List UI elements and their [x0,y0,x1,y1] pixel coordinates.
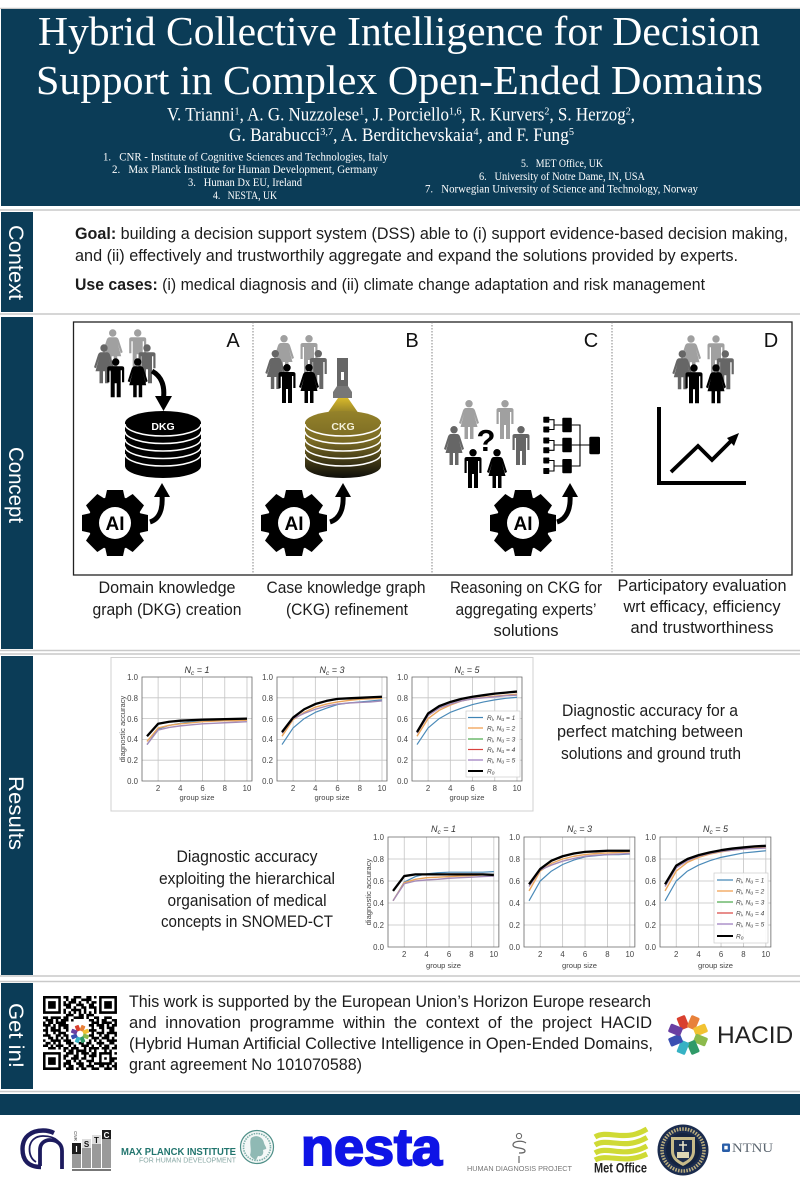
chart: Nc=3: 10 [625,950,635,959]
chart: Nc=1: 2 [156,784,160,793]
logo: ISTC: C [104,1131,110,1140]
chart: Nc=3: 2 [538,950,542,959]
legend: R [487,747,492,754]
chart group: perfect matching [111,658,533,811]
chart: Nc=1: = 1 [194,665,210,675]
concept captions: wrt efficacy, efficiency [622,598,781,616]
logo: Human Diagnosis Project: HUMAN DIAGNOSIS PROJECT [467,1164,572,1173]
legend: = 5 [753,922,765,928]
logo: Met Office [594,1129,647,1176]
legend: R [736,878,741,884]
legend: i [741,902,743,908]
legend: R [487,726,492,732]
arrow: experts to DKG [152,371,172,411]
authors: 3,7 [320,126,334,138]
legend: R [487,758,492,764]
legend: , N [493,758,502,764]
arrow: AI to CKG [330,483,351,522]
header banner [1,8,800,206]
chart: Nc=5: N [703,824,709,834]
authors: 5 [569,126,574,138]
chart: Nc=3: group size [314,793,350,802]
logo: ISTC: CNR [73,1131,78,1142]
chart: Nc=3: 0.8 [509,855,520,864]
legend: o [741,936,744,942]
logo: nesta: nesta [301,1119,443,1177]
icon: AI gear B [261,490,327,556]
icon: AI gear B: AI [284,514,304,535]
legend: R [736,900,741,906]
legend: = 2 [753,888,765,896]
chart: Nc=3: 8 [358,784,362,793]
chart: Nc=1: 10 [489,950,499,959]
tab label: get in: Get in! [4,1003,27,1068]
chart: Nc=1: 0.4 [127,735,139,744]
chart: Nc=1: 0.4 [373,899,385,908]
concept captions: (CKG) refinement [286,601,408,619]
text: hierarchical description: organisation of medical [168,892,326,910]
concept captions: Domain knowledge [98,579,236,597]
legend: u [750,880,753,886]
logo: NTNU [722,1140,774,1155]
chart: Nc=3: 8 [605,950,610,959]
chart: Nc=5: 8 [741,950,746,959]
authors [167,106,635,146]
chart: Nc=5: 0.8 [397,694,408,703]
title [36,8,763,103]
chart: Nc=1: 4 [424,950,429,959]
chart: Nc=3: 2 [291,784,295,793]
icon: experts group D [672,335,734,403]
legend: R [736,934,741,940]
chart: Nc=1: 6 [447,950,451,959]
chart: Nc=3: 0.0 [262,777,274,786]
icon: experts group A [94,329,156,397]
panel: get in [1,983,793,1089]
tab label: results: Results [4,776,27,850]
chart: Nc=1: N [431,824,437,834]
legend: , N [742,888,751,896]
legend: u [501,760,504,766]
legend: = 2 [504,726,516,732]
chart: Nc=1: 0.6 [373,877,384,886]
legend: u [750,890,753,896]
chart: Nc=5: 1.0 [397,673,409,682]
legend: R [487,715,492,722]
chart: Nc=1: 0.8 [373,855,384,864]
chart: Nc=3: 0.6 [509,877,520,886]
column C: reasoning [444,330,600,556]
chart: Nc=5: 0.6 [397,715,408,724]
affiliations left: 1. CNR - Institute of Cognitive Sciences and Technologies, Italy [103,152,388,164]
chart: Nc=1: 0.6 [127,715,138,724]
affiliations right: 6. University of Notre Dame, IN, USA [479,171,646,183]
chart: Nc=3 [262,665,387,802]
chart: Nc=5: 8 [493,784,497,793]
chart: Nc=5: 0.0 [397,777,409,786]
logo: ISTC: S [84,1140,90,1149]
funding text: grant agreement No 101070588) [129,1056,362,1074]
logo: Human Diagnosis Project [467,1133,572,1173]
chart: Nc=5: 0.4 [645,899,657,908]
chart: Nc=3: 4 [313,784,318,793]
legend: = 3 [753,900,765,906]
authors: , J. Porciello [364,106,449,126]
chart: Nc=3: 10 [378,784,387,793]
legend: i [492,760,494,766]
logo: University of Notre Dame seal [658,1124,708,1176]
legend: u [501,749,504,755]
chart: Nc=3: 1.0 [262,673,274,682]
authors: 1 [359,106,364,118]
chart: Nc=5: 6 [470,784,475,793]
icon: CKG database [305,411,381,478]
icon: experts group C [444,400,530,488]
chart: Nc=3: = 3 [329,665,345,675]
chart: Nc=3: 6 [583,950,587,959]
chart: Nc=3: 0.8 [262,694,273,703]
chart: Nc=3: c [326,670,330,677]
chart: Nc=3: 0.2 [509,921,520,930]
legend: i [492,749,494,755]
chart: Nc=5: 10 [761,950,771,959]
footer band [0,1094,800,1115]
tab label: context: Context [4,225,27,300]
affiliations right: 5. MET Office, UK [521,158,604,170]
legend: = 5 [504,758,516,764]
chart: Nc=3: 4 [560,950,565,959]
legend: i [492,728,494,734]
goal text [75,225,788,265]
chart: Nc=5: 4 [696,950,701,959]
chart: Nc=5: 4 [448,784,453,793]
authors: , [631,106,635,126]
chart: Nc=3: = 3 [577,824,592,834]
logo: Max Planck Institute: FOR HUMAN DEVELOPMENT [139,1158,237,1164]
concept captions: Participatory evaluation [618,577,786,595]
affiliations left [103,152,388,202]
chart: Nc=5: 2 [674,950,678,959]
authors: , and F. Fung [478,126,569,146]
title: Support in Complex Open-Ended Domains [36,57,763,103]
icon: AI gear C [490,490,556,556]
column B: CKG refinement: B [405,330,419,352]
authors: 1,6 [449,106,462,118]
tab label: concept: Concept [4,447,27,523]
chart: Nc=3: 0.4 [509,899,521,908]
y axis label: diagnostic accuracy [118,695,127,762]
authors: 4 [473,126,479,138]
chart: Nc=1: 6 [200,784,205,793]
chart: Nc=5: 0.0 [645,943,657,952]
column A: DKG creation [82,329,240,556]
authors: 2 [544,106,549,118]
icon: question mark: ? [477,423,495,458]
legend: o [492,770,495,776]
column A: DKG creation: A [226,330,240,352]
goal text: and (ii) effectively and trustworthily aggregate and expand the solutions provided by experts. [75,247,738,265]
chart: Nc=1 [127,665,252,802]
chart: Nc=5: group size [698,961,733,970]
chart: Nc=5: c [461,670,465,677]
chart: Nc=1: 2 [402,950,406,959]
text: perfect matching description: perfect matching between [557,723,743,741]
icon: experts group B [265,335,327,403]
chart: Nc=1: 0.2 [373,921,384,930]
chart: Nc=1 [373,824,499,970]
legend: = 1 [753,878,765,884]
chart: Nc=1: = 1 [441,824,456,834]
legend: u [750,912,753,918]
chart: Nc=1: c [437,829,441,836]
chart: Nc=5: N [454,665,461,675]
chart: Nc=5: 0.6 [645,877,656,886]
chart: Nc=1: 0.8 [127,694,138,703]
authors: , A. Berditchevskaia [333,126,473,146]
icon: rising line chart [659,407,746,483]
legend: i [492,717,494,723]
text: perfect matching description: Diagnostic accuracy for a [562,702,738,720]
chart: Nc=1: 8 [469,950,474,959]
funding text: This work is supported by the European Union’s Horizon Europe research [129,993,651,1011]
affiliations right: 7. Norwegian University of Science and Technology, Norway [425,184,698,196]
chart: Nc=3: group size [562,961,597,970]
chart: Nc=5: 10 [513,784,522,793]
chart: Nc=1: 10 [243,784,252,793]
chart: Nc=3: c [573,829,577,836]
legend [466,711,520,777]
affiliations left: 4. NESTA, UK [213,190,278,202]
legend: u [501,738,504,744]
logo: Max Planck Institute [121,1130,274,1164]
chart: Nc=5: 0.2 [397,756,408,765]
affiliations left: 2. Max Planck Institute for Human Development, Germany [112,164,378,176]
logo: ISTC: T [94,1136,99,1145]
legend: u [750,902,753,908]
column C: reasoning: C [584,330,598,352]
authors: V. Trianni [167,106,241,126]
chart: Nc=3: 0.4 [262,735,274,744]
chart: Nc=1: 0.0 [373,943,385,952]
legend: R [736,910,741,918]
chart: Nc=3: 1.0 [509,833,521,842]
legend: i [741,890,743,896]
legend: , N [493,715,502,722]
concept captions: solutions [494,622,558,640]
icon: DKG database: DKG [151,421,175,433]
authors: , S. Herzog [549,106,626,126]
chart: Nc=1: 1.0 [127,673,139,682]
chart: Nc=3: N [567,824,573,834]
legend: , N [493,726,502,732]
chart: Nc=3 [509,824,635,970]
chart group: hierarchical [364,824,771,970]
arrow: AI to DKG [150,483,170,522]
legend: u [501,717,504,723]
icon: QR centre flower [71,1025,89,1043]
concept captions: aggregating experts’ [456,601,596,619]
legend: u [750,924,753,930]
logo: HACID: HACID [717,1022,793,1049]
icon: AI gear A: AI [106,514,124,535]
legend: i [741,880,743,886]
chart: Nc=1: 0.0 [127,777,139,786]
title: Hybrid Collective Intelligence for Decision [38,8,760,54]
panel: concept [1,317,792,649]
chart: Nc=1: 4 [178,784,183,793]
chart: Nc=3: N [319,665,326,675]
legend [714,873,768,943]
chart: Nc=3: 0.6 [262,715,273,724]
chart: Nc=3: 0.0 [509,943,521,952]
affiliations right [425,158,698,196]
legend: R [736,922,741,928]
chart: Nc=5: group size [449,793,485,802]
chart: Nc=1: 1.0 [373,833,385,842]
legend: i [741,924,743,930]
logo: ISTC: I [75,1145,78,1154]
text: perfect matching description: solutions and ground truth [561,745,741,763]
logo: Met Office: Met Office [594,1160,647,1176]
icon: spotlight [327,358,359,414]
affiliations left: 3. Human Dx EU, Ireland [188,177,302,189]
chart: Nc=3: 6 [335,784,340,793]
chart: Nc=5 [645,824,771,970]
legend: = 4 [753,910,765,918]
legend: i [492,738,494,744]
funding text: and innovation programme within the context of the project HACID [129,1014,652,1032]
legend: , N [742,878,751,884]
legend: , N [742,910,751,918]
concept captions: Case knowledge graph [266,579,426,597]
concept figure frame [74,322,792,575]
chart: Nc=5 [397,665,522,802]
authors: , A. G. Nuzzolese [240,106,359,126]
panel: context [1,212,788,312]
chart: Nc=5: 2 [426,784,430,793]
goal text: Goal: building a decision support system (DSS) able to (i) support evidence-based decision making, [75,225,788,243]
chart: Nc=5: = 5 [713,824,729,834]
chart: Nc=5: 0.4 [397,735,409,744]
chart: Nc=5: 0.2 [645,921,656,930]
text: hierarchical description [159,848,335,931]
panel: results [1,656,771,975]
chart: Nc=1: group size [426,961,461,970]
icon: AI gear C: AI [514,514,532,535]
chart: Nc=1: N [184,665,191,675]
legend: = 3 [504,736,516,744]
concept captions: and trustworthiness [630,619,774,637]
logo: NTNU: NTNU [732,1140,774,1155]
QR code [43,997,117,1069]
column B: CKG refinement [261,330,419,556]
legend: R [487,736,492,744]
text: perfect matching description [557,702,743,763]
funding text [129,993,653,1074]
icon: solution tree [543,417,600,474]
concept captions: graph (DKG) creation [92,601,242,619]
legend: , N [742,922,751,928]
concept captions: Reasoning on CKG for [450,579,603,597]
chart: Nc=5: 0.8 [645,855,656,864]
authors: 1 [235,106,240,118]
chart: Nc=1: 8 [223,784,227,793]
logo: HACID [668,1015,793,1055]
legend: R [736,888,741,896]
icon: AI gear A [82,490,148,556]
authors: G. Barabucci [229,126,327,146]
logo: Max Planck Institute: MAX PLANCK INSTITUTE [121,1147,236,1158]
logo: ISTC [72,1130,111,1171]
use cases text: Use cases: (i) medical diagnosis and (ii) climate change adaptation and risk management [75,276,705,294]
logo strip [22,1119,774,1177]
text: hierarchical description: concepts in SNOMED-CT [161,913,333,931]
logo: CNR [22,1130,62,1169]
chart: Nc=5: c [709,829,713,836]
text: hierarchical description: exploiting the hierarchical [159,870,335,888]
arrow: AI to tree [557,483,578,522]
legend: , N [493,747,502,754]
chart: Nc=3: 0.2 [262,756,273,765]
icon: CKG database: CKG [331,421,355,433]
authors: , R. Kurvers [462,106,544,126]
legend: = 4 [504,747,516,754]
legend: = 1 [504,715,516,722]
column D: evaluation: D [764,330,778,352]
authors: 2 [626,106,631,118]
chart: Nc=5: = 5 [464,665,480,675]
legend: i [741,912,743,918]
legend: , N [742,900,751,906]
legend: , N [493,736,502,744]
legend: R [487,768,492,776]
icon: DKG database [125,411,201,478]
chart: Nc=1: c [191,670,195,677]
legend: u [501,728,504,734]
chart: Nc=1: 0.2 [127,756,138,765]
chart: Nc=5: 1.0 [645,833,657,842]
column D: evaluation [659,330,778,483]
concept captions [92,577,786,640]
chart: Nc=1: group size [179,793,215,802]
chart: Nc=5: 6 [719,950,723,959]
y axis label: diagnostic accuracy [364,858,373,925]
funding text: (Hybrid Human Artificial Collective Intelligence in Open-Ended Domains, [129,1035,653,1053]
text: hierarchical description: Diagnostic accuracy [176,848,318,866]
